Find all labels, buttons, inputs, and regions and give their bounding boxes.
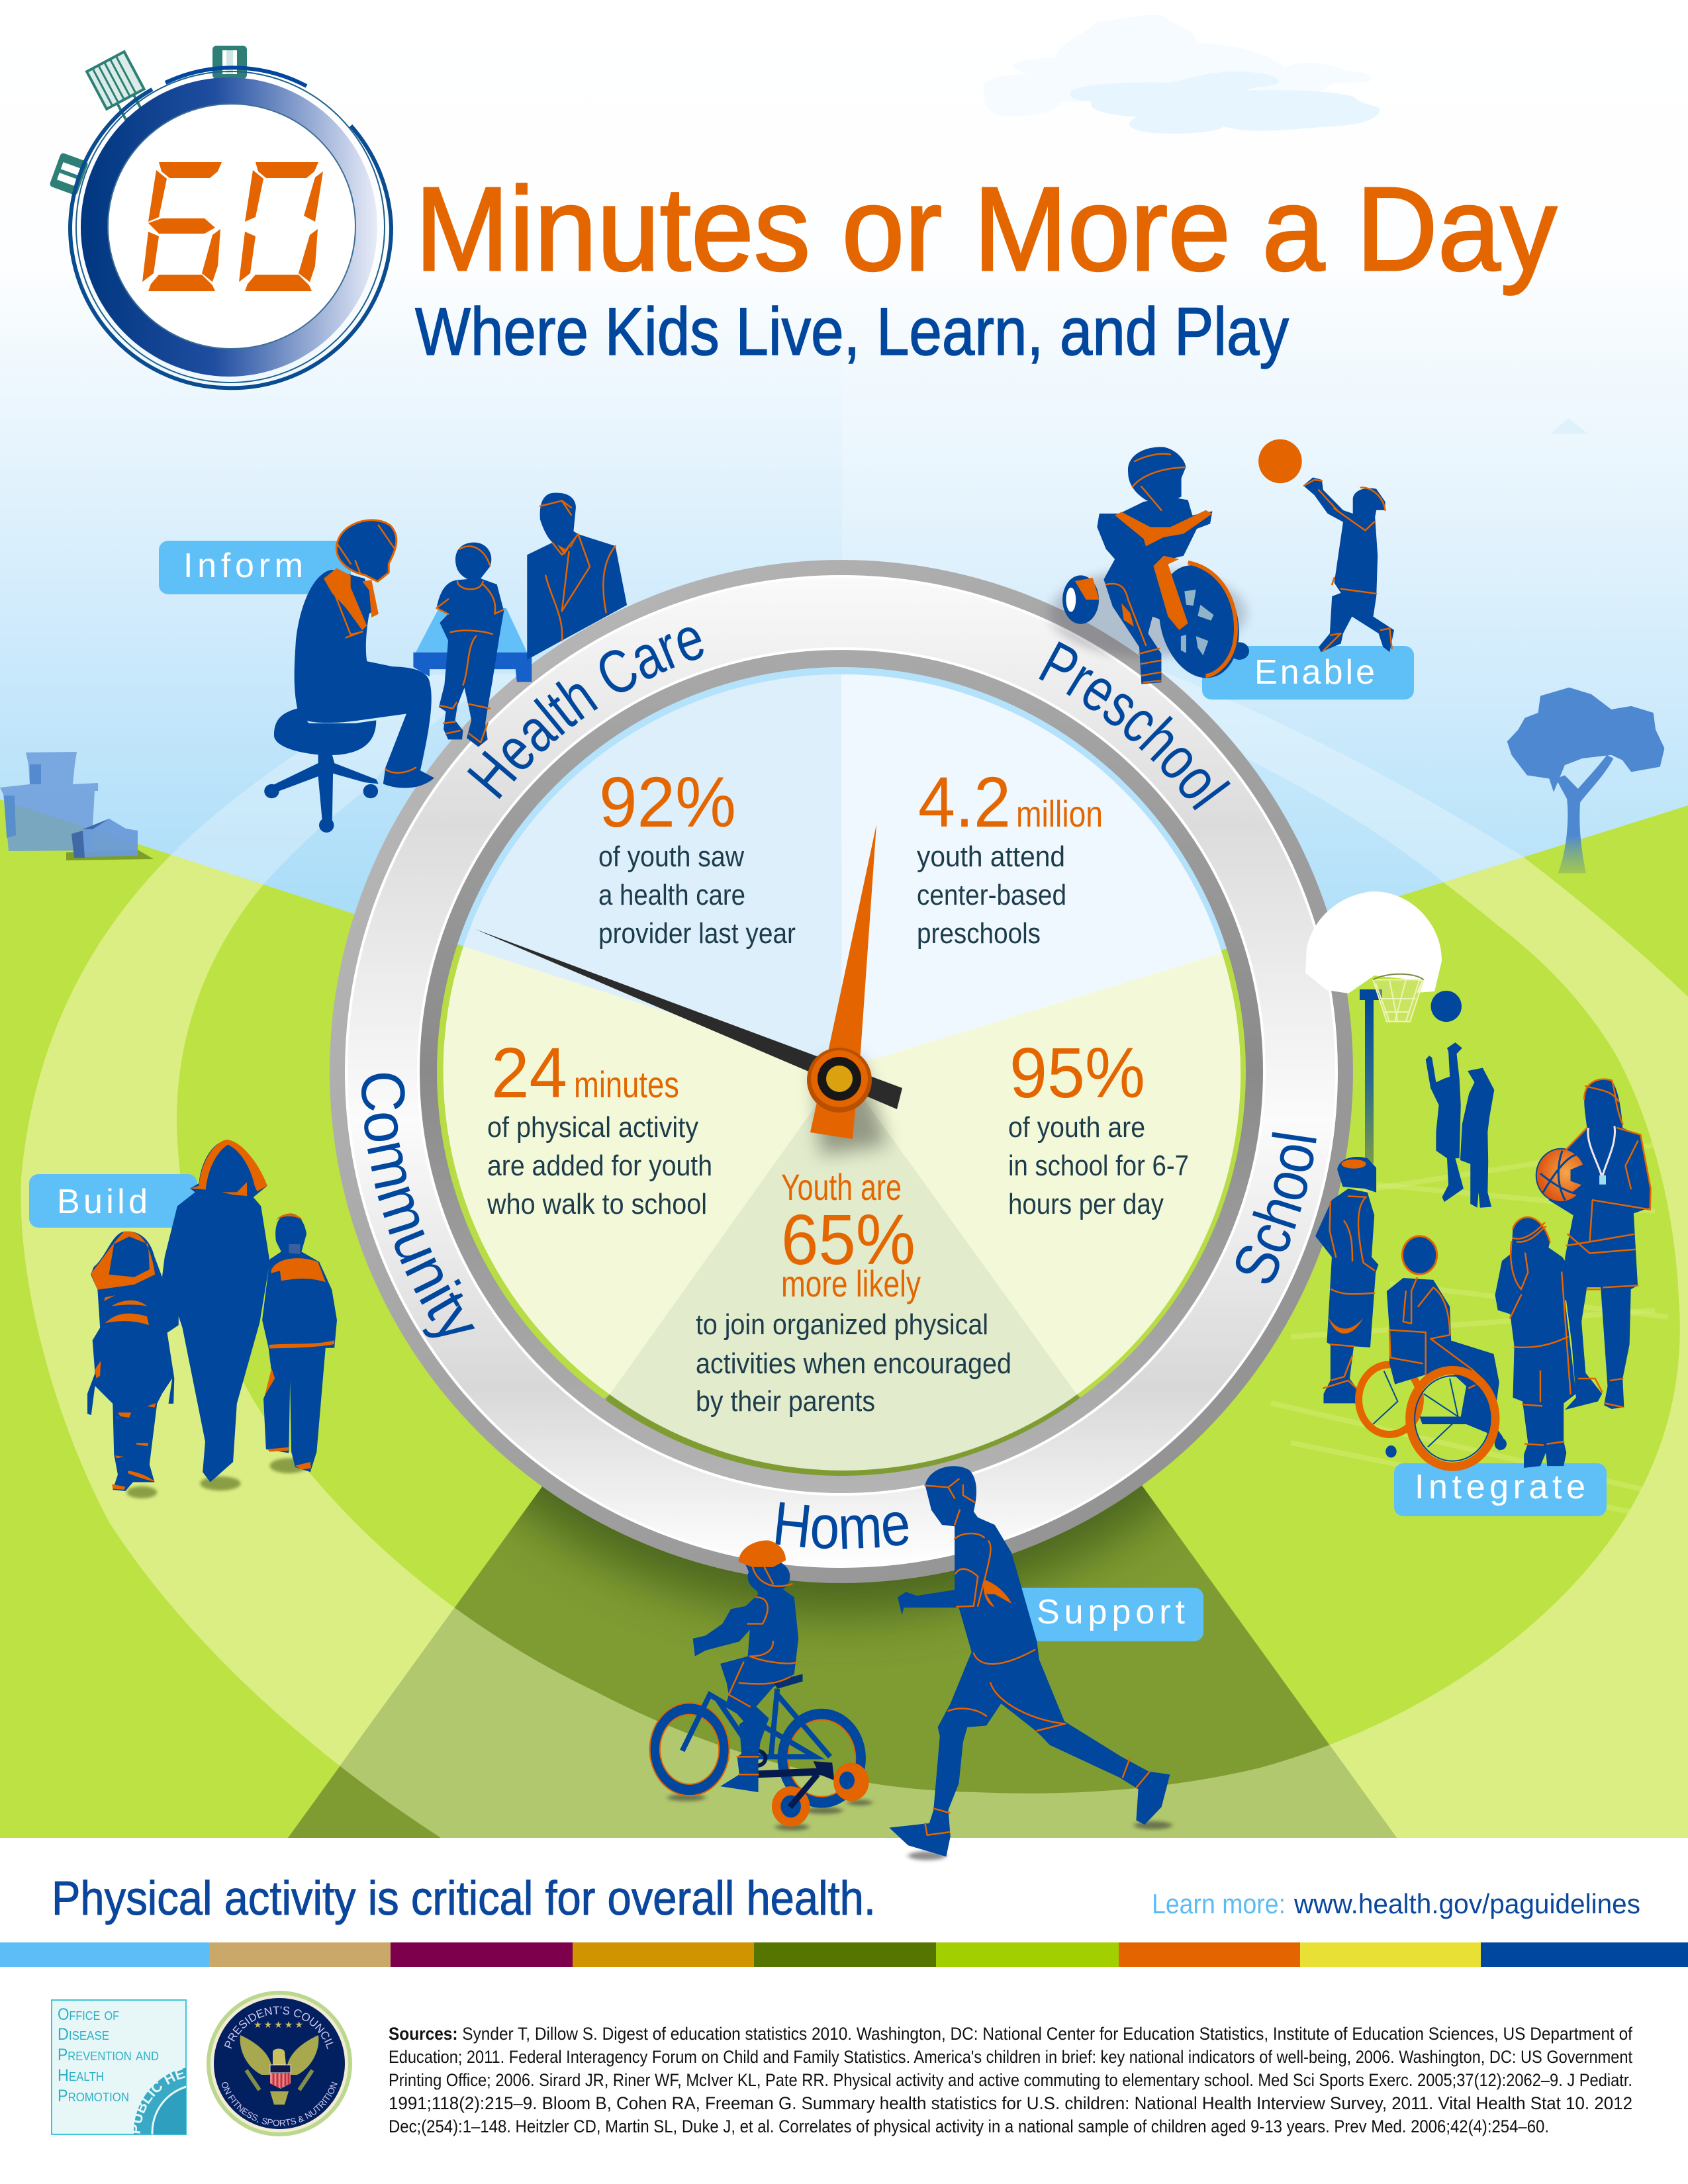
stopwatch (49, 46, 391, 388)
label: Health Care: Health Care (467, 627, 704, 799)
ground shadows (126, 1458, 308, 1498)
tag: Build (29, 1174, 197, 1228)
sources: 1991;118(2):215–9. Bloom B, Cohen RA, Freeman G. Summary health statistics for U.S. children: National Health Interview Survey, 2011. Vital Health Stat 10. 2012 (389, 2093, 1632, 2113)
hub (807, 1048, 872, 1113)
cyclist child (650, 1541, 869, 1827)
stat: 4.2 million: million (1016, 793, 1103, 835)
ground (0, 799, 1688, 1838)
stat: 92 percent: 92% (599, 762, 736, 842)
stopwatch digits 60 (142, 162, 323, 291)
logo: Office of Disease Prevention and Health Promotion: PUBLIC HEALTH (134, 2069, 185, 2134)
seated doctor (264, 520, 434, 833)
boy (262, 1214, 337, 1472)
tag: Integrate: Integrate (1415, 1468, 1585, 1506)
cloud (984, 15, 1380, 134)
figures: home group (650, 1466, 1172, 1860)
logo: Office of Disease Prevention and Health Promotion: Health (58, 2066, 104, 2085)
mother (162, 1140, 270, 1482)
tag: Inform (159, 541, 351, 594)
stat: 95 percent: in school for 6-7 (1008, 1150, 1189, 1182)
dial rim and sectors (331, 596, 1350, 1588)
logo: President's Council seal (207, 1991, 352, 2136)
stat: 95 percent: hours per day (1008, 1188, 1164, 1220)
stat: 65 percent: by their parents (696, 1385, 875, 1418)
stat: 65 percent: Youth are (781, 1166, 902, 1208)
figures: health care group (264, 493, 627, 833)
court streaks (1271, 1145, 1681, 1522)
two jumping players (1426, 1042, 1494, 1208)
home sector ground (288, 1485, 1397, 1838)
clock hands (475, 825, 902, 1155)
label: Home: Home (776, 1502, 908, 1549)
figures: school group (0, 891, 1688, 2184)
stat: 65 percent: activities when encouraged (696, 1347, 1011, 1380)
stat: 92 percent: provider last year (598, 917, 796, 950)
dial (330, 560, 1353, 1588)
learn more link (1152, 1888, 1640, 1919)
logo: Office of Disease Prevention and Health Promotion: Disease (58, 2025, 109, 2044)
logo: Office of Disease Prevention and Health Promotion: Office of (58, 2005, 119, 2024)
stat: 4.2 million: preschools (917, 917, 1041, 950)
runner (889, 1466, 1170, 1856)
colour bar (0, 1942, 1688, 1967)
boy with helmet (1315, 1157, 1378, 1403)
stat: 65 percent: 65% (781, 1199, 915, 1279)
logo: President's Council seal: PRESIDENT'S COUNCIL (224, 2006, 334, 2049)
dial sector: community (444, 946, 842, 1394)
front wheel (1150, 561, 1248, 682)
stool (264, 709, 379, 833)
girl (87, 1231, 179, 1491)
label: Preschool: Preschool (1039, 641, 1231, 810)
stat: 24 minutes (487, 1032, 712, 1220)
basketball hoop (1305, 891, 1651, 1468)
logo: President's Council seal: ON FITNESS, SPORTS & NUTRITION (219, 2080, 340, 2128)
tag: Inform: Inform (183, 547, 303, 585)
hoop net (1373, 979, 1424, 1022)
stat: 92 percent (598, 762, 796, 950)
stat: 65 percent: to join organized physical (696, 1308, 988, 1341)
tricycle child (1051, 447, 1249, 684)
stat: 92 percent: of youth saw (598, 841, 744, 873)
exam table (413, 608, 532, 682)
closing statement: Physical activity is critical for overall health. (52, 1872, 876, 1925)
man in suit (527, 493, 627, 660)
stat: 24 minutes: are added for youth (487, 1150, 712, 1182)
figures: family walking (87, 1140, 337, 1498)
white footer panel (0, 1838, 1688, 2184)
stat: 4.2 million: 4.2 (918, 762, 1011, 842)
stat: 95 percent: of youth are (1008, 1111, 1145, 1144)
dial outer ring (330, 560, 1353, 1583)
stopwatch crowns (49, 46, 247, 196)
tag: Support: Support (1037, 1593, 1186, 1631)
stat: 4.2 million: center-based (917, 879, 1066, 911)
tag: Support (993, 1588, 1203, 1641)
logo: Office of Disease Prevention and Health Promotion (52, 2000, 266, 2184)
basketball (1431, 991, 1462, 1022)
stat: 24 minutes: 24 (491, 1032, 567, 1113)
learn more link: www.health.gov/paguidelines (1293, 1888, 1640, 1919)
girl catching ball (1303, 477, 1394, 652)
stat: 95 percent: 95% (1009, 1032, 1145, 1113)
hour hand (475, 929, 902, 1109)
label: Community: Community (361, 1073, 475, 1338)
stat: 24 minutes: minutes (574, 1064, 679, 1105)
logo: Office of Disease Prevention and Health Promotion: Promotion (58, 2087, 129, 2105)
sources (389, 2024, 1632, 2136)
stat: 95 percent (1008, 1032, 1189, 1220)
figures: preschool group (1051, 439, 1394, 684)
dial sector: school (842, 953, 1241, 1394)
wheelchair athlete (1359, 1236, 1507, 1467)
title: Minutes or More a Day (415, 163, 1557, 296)
seal eagle (240, 2035, 318, 2105)
logo: Office of Disease Prevention and Health Promotion: Prevention and (58, 2046, 159, 2064)
rear wheel (1062, 575, 1100, 624)
tag: Enable (1202, 646, 1414, 700)
ground shadows (667, 1794, 1172, 1860)
seated child (436, 543, 504, 747)
dial sector: health care (463, 674, 842, 1069)
coach with basketball (1536, 1079, 1651, 1410)
tag: Integrate (1394, 1463, 1607, 1516)
dial sector: preschool (841, 674, 1222, 1069)
tree (1507, 688, 1664, 873)
stat: 24 minutes: who walk to school (487, 1188, 707, 1220)
tag: Build: Build (57, 1183, 148, 1221)
dial sector: home (610, 1069, 1077, 1471)
stat: 4.2 million (917, 762, 1103, 950)
stat: 24 minutes: of physical activity (487, 1111, 698, 1144)
ball (1258, 439, 1302, 483)
sources: Dec;(254):1–148. Heitzler CD, Martin SL, Duke J, et al. Correlates of physical activity in a national sample of children aged 9-13 years. Prev Med. 2006;42(4):254–60. (389, 2116, 1549, 2136)
minute hand (810, 825, 876, 1139)
label: School: School (1235, 1132, 1317, 1284)
background: sky (0, 309, 1688, 914)
tag: Enable: Enable (1254, 653, 1375, 692)
learn more link: Learn more: (1152, 1888, 1286, 1919)
subtitle: Where Kids Live, Learn, and Play (415, 294, 1289, 369)
girl with ponytail (1495, 1217, 1579, 1468)
stat: 65 percent: more likely (781, 1263, 921, 1304)
stat: 92 percent: a health care (598, 879, 745, 911)
stat: 4.2 million: youth attend (917, 841, 1065, 873)
buildings on the horizon (0, 752, 154, 860)
seal stars: ★★★★★ (254, 2019, 305, 2030)
stat: 65 percent (696, 1166, 1011, 1418)
bicycle (650, 1689, 869, 1827)
